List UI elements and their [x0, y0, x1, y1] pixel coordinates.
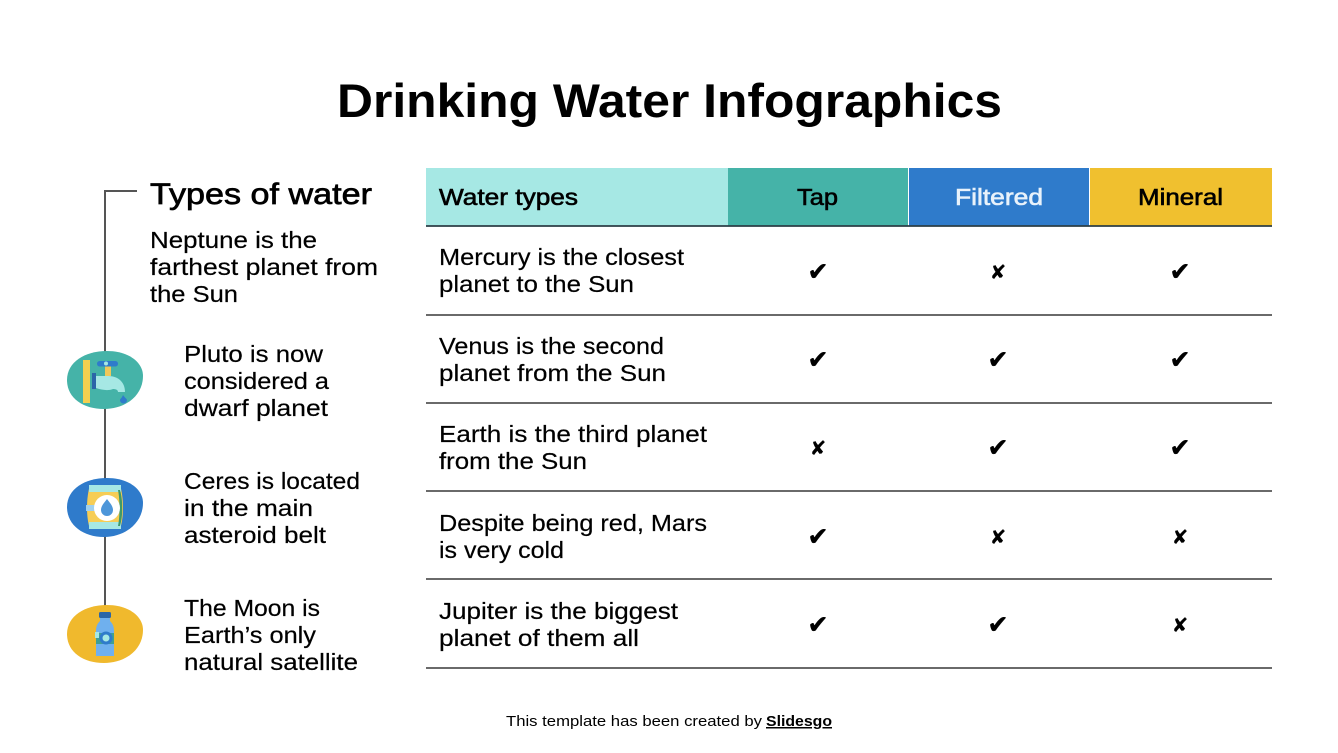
text block: Pluto: Pluto is now [184, 341, 323, 367]
title: Drinking Water Infographics [337, 74, 1002, 127]
table header [426, 168, 1272, 226]
table header: Filtered [955, 184, 1043, 210]
text block: Ceres [184, 468, 360, 548]
text block: Moon: natural satellite [184, 649, 358, 675]
text block: Neptune: the Sun [150, 281, 238, 307]
text block: Ceres: in the main [184, 495, 313, 521]
footer credit: Slidesgo [766, 713, 832, 730]
text block: Ceres: Ceres is located [184, 468, 360, 494]
row: Mars: ✘ [990, 525, 1006, 549]
row: Mars: is very cold [439, 537, 564, 563]
row: Venus: Venus is the second [439, 333, 664, 359]
icon: filtered water [67, 478, 143, 537]
table header: Tap [797, 184, 838, 210]
row: Jupiter: planet of them all [439, 625, 639, 651]
row: Mars: Despite being red, Mars [439, 510, 707, 536]
row: Jupiter [439, 598, 1188, 651]
text block: Moon: Earth’s only [184, 622, 317, 648]
row: Venus [439, 333, 1190, 386]
timeline connector [105, 191, 137, 610]
table header: Water types [439, 184, 578, 210]
row: Earth [439, 421, 1190, 474]
row: Mercury: ✘ [990, 260, 1006, 284]
text block: Neptune [150, 227, 378, 307]
table header: Mineral [1138, 184, 1223, 210]
panel: types of water [67, 178, 378, 675]
text block: Pluto: considered a [184, 368, 329, 394]
text block: Ceres: asteroid belt [184, 522, 327, 548]
panel: comparison table [426, 168, 1272, 668]
row: Mars [439, 510, 1188, 563]
row: Jupiter: ✔ [808, 610, 828, 639]
row: Earth: ✔ [1170, 433, 1190, 462]
footer credit: This template has been created by [506, 713, 763, 730]
row: Venus: planet from the Sun [439, 360, 666, 386]
heading: types of water: Types of water [150, 178, 372, 211]
row: Mercury: Mercury is the closest [439, 244, 685, 270]
icon: mineral water [67, 605, 143, 663]
text block: Moon [184, 595, 358, 675]
row: Earth: from the Sun [439, 448, 587, 474]
row: Venus: ✔ [988, 345, 1008, 374]
text block: Moon: The Moon is [184, 595, 320, 621]
row: Jupiter: ✔ [988, 610, 1008, 639]
row: Venus: ✔ [808, 345, 828, 374]
text block: Pluto: dwarf planet [184, 395, 329, 421]
row: Mercury: planet to the Sun [439, 271, 634, 297]
row: Earth: ✘ [810, 436, 826, 460]
table row lines [426, 226, 1272, 668]
row: Earth: ✔ [988, 433, 1008, 462]
text block: Neptune: farthest planet from [150, 254, 378, 280]
row: Earth: Earth is the third planet [439, 421, 708, 447]
row: Jupiter: ✘ [1172, 613, 1188, 637]
row: Venus: ✔ [1170, 345, 1190, 374]
row: Jupiter: Jupiter is the biggest [439, 598, 679, 624]
row: Mercury: ✔ [1170, 257, 1190, 286]
row: Mercury: ✔ [808, 257, 828, 286]
row: Mars: ✔ [808, 522, 828, 551]
text block: Pluto [184, 341, 329, 421]
row: Mars: ✘ [1172, 525, 1188, 549]
row: Mercury [439, 244, 1190, 297]
text block: Neptune: Neptune is the [150, 227, 317, 253]
icon: tap water [67, 351, 143, 409]
